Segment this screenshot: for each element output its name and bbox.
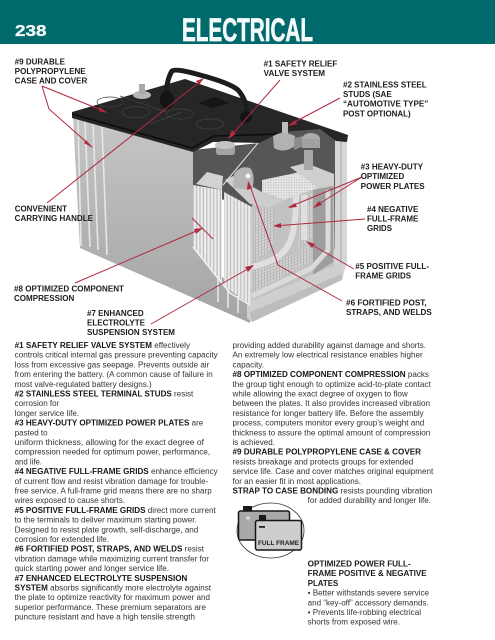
label #2 bbox=[343, 80, 428, 118]
lower grid bbox=[255, 245, 311, 291]
label #1: VALVE SYSTEM bbox=[264, 69, 325, 78]
arrow: component compression bbox=[75, 218, 213, 283]
label #9: #9 DURABLE bbox=[15, 58, 66, 66]
label carrying handle bbox=[15, 204, 94, 223]
left body text column: free service. A full-frame grid means there are no sharp bbox=[15, 486, 212, 496]
label #8 bbox=[14, 284, 124, 303]
left body text column: #1 SAFETY RELIEF VALVE SYSTEM effectively bbox=[15, 341, 190, 350]
right body text column: is achieved. bbox=[232, 438, 275, 447]
interior cavity bbox=[193, 128, 338, 250]
left body text column bbox=[14, 341, 218, 622]
label #7: #7 ENHANCED bbox=[87, 309, 144, 318]
right body text column: resists breakage and protects groups for extended bbox=[232, 457, 413, 466]
right body text column: STRAP TO CASE BONDING resists pounding vibration bbox=[232, 486, 432, 496]
left body text column: #6 FORTIFIED POST, STRAPS, AND WELDS resist bbox=[15, 545, 205, 554]
label #9: CASE AND COVER bbox=[15, 76, 88, 86]
left body text column: #7 ENHANCED ELECTROLYTE SUSPENSION bbox=[15, 574, 188, 583]
callout: optimized power full-frame plates bbox=[308, 560, 430, 627]
lid raised pad bbox=[198, 97, 229, 108]
label #3: OPTIMIZED bbox=[361, 172, 405, 181]
battery case side bbox=[73, 117, 250, 323]
label #5 bbox=[355, 262, 429, 280]
label #8: COMPRESSION bbox=[14, 294, 75, 303]
title: ELECTRICAL bbox=[182, 12, 313, 48]
left body text column: from entering the battery. (A common cause of failure in bbox=[15, 370, 213, 379]
label #6 bbox=[346, 298, 432, 317]
post column bbox=[304, 150, 313, 170]
right body text column: capacity. bbox=[232, 360, 264, 369]
callout: optimized power full-frame plates: PLATES bbox=[308, 579, 339, 588]
label #4: #4 NEGATIVE bbox=[367, 205, 419, 214]
callout: optimized power full-frame plates: • Prevents life-robbing electrical bbox=[308, 608, 421, 617]
label #7 bbox=[87, 309, 175, 337]
right body text column: process, computers monitor every group’s weight and bbox=[232, 419, 424, 428]
left body text column: longer service life. bbox=[15, 409, 79, 418]
callout: optimized power full-frame plates: • Better withstands severe service bbox=[308, 589, 430, 598]
label carrying handle: CONVENIENT bbox=[15, 204, 67, 214]
right body text column: An extremely low electrical resistance enables higher bbox=[232, 351, 423, 360]
thin white strap line bbox=[223, 143, 258, 185]
right body text column: for added durability and longer life. bbox=[308, 496, 431, 505]
right body text column: resistance for longer battery life. Before the assembly bbox=[232, 409, 424, 418]
label #7: SUSPENSION SYSTEM bbox=[87, 328, 175, 337]
label #2: STUDS (SAE bbox=[343, 90, 392, 99]
right case wall bbox=[335, 138, 347, 282]
left body text column: corrosion for extended life. bbox=[15, 535, 109, 544]
arrow: case and cover bbox=[42, 86, 107, 148]
label #2: POST OPTIONAL) bbox=[343, 110, 411, 118]
positive grid upper bbox=[298, 192, 312, 248]
battery cutaway illustration bbox=[72, 70, 348, 323]
right body text column: for an easier fit in most applications. bbox=[232, 477, 361, 486]
page number: 238 bbox=[15, 23, 47, 40]
left body text column: vibration damage while maximizing current transfer for bbox=[15, 554, 209, 563]
left body text column: wires exposed to cause shorts. bbox=[14, 496, 125, 505]
right body text column bbox=[231, 341, 434, 505]
arrow: stainless studs bbox=[288, 98, 340, 126]
callout labels bbox=[14, 58, 432, 337]
label #2: #2 STAINLESS STEEL bbox=[343, 80, 427, 90]
white strap frame bbox=[252, 195, 304, 267]
left body text column: and life. bbox=[15, 457, 42, 466]
centre valve cap bbox=[215, 141, 235, 155]
label #9 bbox=[15, 58, 88, 86]
left body text column: quick starting power and longer service life. bbox=[15, 564, 169, 573]
right body text column: #9 DURABLE POLYPROPYLENE CASE & COVER bbox=[232, 448, 421, 457]
arrow: carrying handle bbox=[47, 78, 204, 203]
right body text column: providing added durability against damage and shorts. bbox=[232, 341, 426, 350]
left body text column: compression needed for optimum power, performance, bbox=[15, 448, 210, 457]
label #5: FRAME GRIDS bbox=[355, 272, 412, 280]
label #6: #6 FORTIFIED POST, bbox=[346, 298, 427, 308]
left body text column: of current flow and resist vibration damage for trouble- bbox=[15, 477, 209, 486]
icon: full frame plates: FULL FRAME bbox=[258, 540, 299, 547]
left body text column: puncture resistant and have a high tensile strength bbox=[15, 613, 195, 622]
left body text column: pasted to bbox=[15, 428, 48, 437]
icon: full frame plates bbox=[237, 503, 304, 558]
left body text column: #4 NEGATIVE FULL-FRAME GRIDS enhance efficiency bbox=[15, 467, 218, 476]
arrow: positive grids bbox=[306, 241, 354, 269]
label #3: #3 HEAVY-DUTY bbox=[361, 162, 424, 172]
label #4: GRIDS bbox=[367, 224, 393, 233]
label #7: ELECTROLYTE bbox=[87, 318, 146, 328]
left body text column: Designed to resist plate growth, self-discharge, and bbox=[15, 525, 198, 534]
arrow: power plates bbox=[288, 177, 362, 208]
callout: optimized power full-frame plates: OPTIMIZED POWER FULL- bbox=[308, 560, 411, 568]
label #1 bbox=[264, 60, 337, 78]
right terminal stud bbox=[273, 122, 320, 151]
icon: full frame plates: + bbox=[245, 513, 251, 523]
left body text column: superior performance. These premium separators are bbox=[15, 603, 207, 612]
base band bbox=[247, 262, 342, 322]
white separator diagonal bbox=[193, 247, 250, 305]
right body text column: between the plates. It also provides increased vibration bbox=[232, 399, 430, 408]
arrow: negative grids bbox=[273, 219, 365, 228]
left body text column: #2 STAINLESS STEEL TERMINAL STUDS resist bbox=[15, 390, 194, 398]
left body text column: SYSTEM absorbs significantly more electrolyte against bbox=[15, 584, 212, 592]
label #2: “AUTOMOTIVE TYPE” bbox=[343, 100, 428, 109]
label #1: #1 SAFETY RELIEF bbox=[264, 60, 337, 68]
right body text column: while allowing the exact degree of oxygen to flow bbox=[231, 390, 408, 398]
callout arrows bbox=[42, 78, 365, 324]
battery lid bbox=[72, 79, 348, 152]
label #4 bbox=[367, 205, 419, 233]
left body text column: loss from excessive gas seepage. Prevents outside air bbox=[15, 360, 210, 369]
right body text column: service life. Case and cover matches original equipment bbox=[232, 467, 434, 476]
left body text column: corrosion for bbox=[15, 399, 60, 408]
right body text column: #8 OPTIMIZED COMPONENT COMPRESSION packs bbox=[232, 370, 429, 379]
label #9: POLYPROPYLENE bbox=[15, 67, 86, 76]
right body text column: thickness to assure the optimal amount of compression bbox=[232, 428, 430, 437]
label carrying handle: CARRYING HANDLE bbox=[15, 214, 94, 223]
callout: optimized power full-frame plates: shorts from exposed wire. bbox=[308, 618, 400, 627]
arrow: fortified post bbox=[247, 181, 342, 301]
plate ribs middle bbox=[224, 192, 252, 306]
left body text column: the plate to optimize reactivity for maximum power and bbox=[15, 593, 210, 602]
cutaway rear plate section bbox=[250, 180, 335, 306]
right body text column: the group tight enough to optimize acid-to-plate contact bbox=[232, 380, 431, 389]
label #3 bbox=[361, 162, 425, 191]
label #8: #8 OPTIMIZED COMPONENT bbox=[14, 284, 124, 294]
cell tops bbox=[262, 172, 318, 200]
label #4: FULL-FRAME bbox=[367, 214, 419, 224]
label #6: STRAPS, AND WELDS bbox=[346, 308, 432, 317]
lug on left post bbox=[233, 167, 254, 190]
left body text column: #5 POSITIVE FULL-FRAME GRIDS direct more current bbox=[15, 506, 216, 515]
header band bbox=[0, 0, 495, 48]
arrow: safety relief valve bbox=[228, 80, 280, 139]
left body text column: controls critical internal gas pressure preventing capacity bbox=[15, 351, 218, 360]
left body text column: most valve-regulated battery designs.) bbox=[15, 380, 152, 389]
callout: optimized power full-frame plates: and “key-off” accessory demands. bbox=[308, 598, 429, 607]
plate ribs left bbox=[193, 185, 222, 283]
label #3: POWER PLATES bbox=[361, 182, 425, 191]
arrow: electrolyte suspension bbox=[151, 265, 254, 324]
label #5: #5 POSITIVE FULL- bbox=[355, 262, 429, 271]
carrying handle bbox=[165, 70, 247, 116]
left body text column: #3 HEAVY-DUTY OPTIMIZED POWER PLATES are bbox=[15, 419, 204, 428]
left body text column: to the terminals to deliver maximum starting power. bbox=[15, 516, 197, 525]
lid stud left bbox=[133, 84, 151, 99]
callout: optimized power full-frame plates: FRAME POSITIVE & NEGATIVE bbox=[308, 569, 427, 578]
left body text column: uniform thickness, allowing for the exact degree of bbox=[15, 438, 205, 447]
negative grid bbox=[254, 206, 275, 262]
